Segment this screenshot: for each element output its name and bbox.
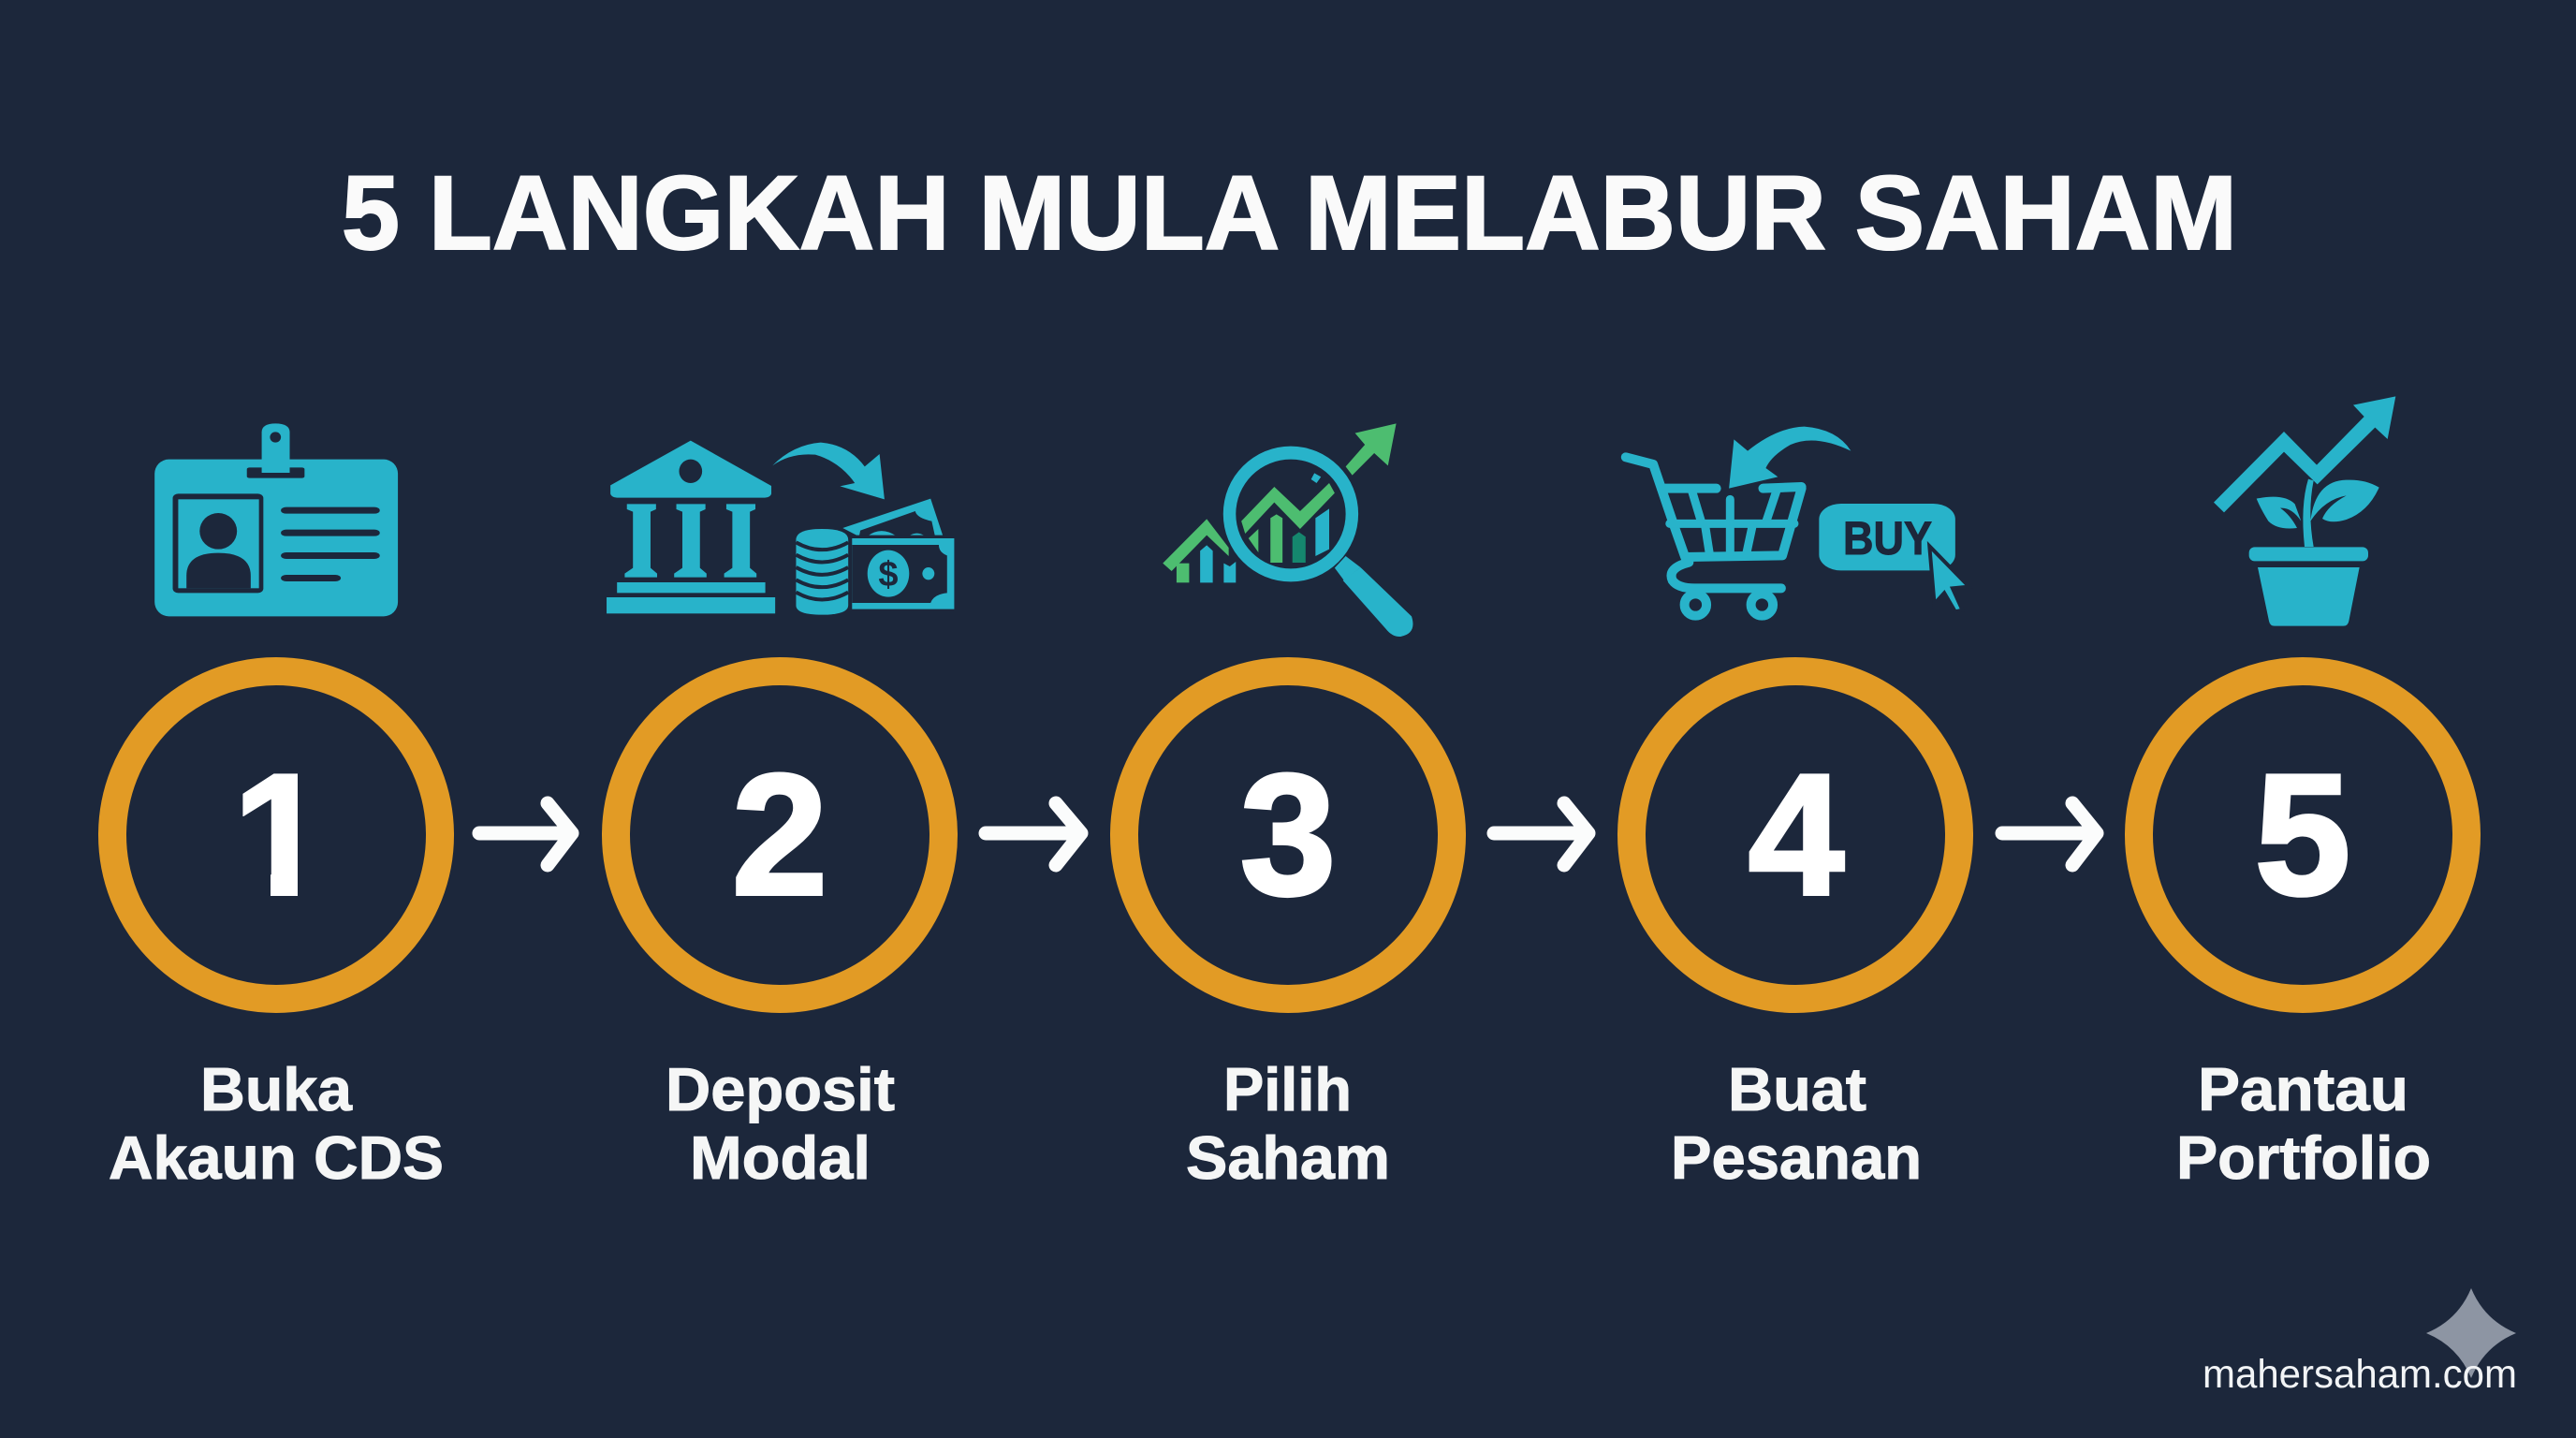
arrow 4 to 5 (2002, 803, 2097, 865)
step 3: 3 (1240, 738, 1336, 931)
label step 5 (2176, 1055, 2431, 1192)
step 2 (616, 671, 944, 999)
label step 2: Modal (690, 1123, 871, 1192)
title: 5 LANGKAH MULA MELABUR SAHAM (342, 154, 2237, 271)
label step 4 (1671, 1055, 1922, 1192)
infographic canvas (98, 174, 2516, 1387)
icon: bank with money: $ (878, 555, 899, 594)
step 3 (1124, 671, 1452, 999)
step 4 (1632, 671, 1959, 999)
step 5: 5 (2255, 738, 2350, 931)
watermark text: mahersaham.com (2203, 1352, 2517, 1397)
label step 5: Pantau (2198, 1055, 2408, 1123)
label step 2 (666, 1055, 895, 1192)
step 5 (2139, 671, 2466, 999)
icon: shopping cart with BUY button: BUY (1843, 512, 1932, 565)
label step 1: Buka (200, 1055, 353, 1123)
label step 2: Deposit (666, 1055, 895, 1123)
icon: magnifier over chart (1163, 423, 1412, 637)
label step 3 (1186, 1055, 1390, 1192)
label step 1: Akaun CDS (109, 1123, 444, 1192)
icon: ID card (154, 423, 398, 616)
icon: shopping cart with BUY button (1626, 427, 1969, 616)
icon: plant with growth arrow (2214, 396, 2395, 626)
icon: bank with money (607, 441, 954, 615)
arrow 3 to 4 (1494, 803, 1588, 865)
step 2: 2 (732, 738, 827, 931)
label step 4: Buat (1728, 1055, 1866, 1123)
icon: watermark sparkle (2426, 1288, 2516, 1378)
step 1: 1 (233, 738, 329, 931)
label step 5: Portfolio (2176, 1123, 2431, 1192)
step 4: 4 (1749, 738, 1844, 931)
step 1 (112, 671, 440, 999)
arrow 1 to 2 (479, 803, 572, 865)
label step 4: Pesanan (1671, 1123, 1922, 1192)
arrow 2 to 3 (986, 803, 1081, 865)
label step 3: Saham (1186, 1123, 1390, 1192)
label step 3: Pilih (1223, 1055, 1352, 1123)
label step 1 (109, 1055, 444, 1192)
